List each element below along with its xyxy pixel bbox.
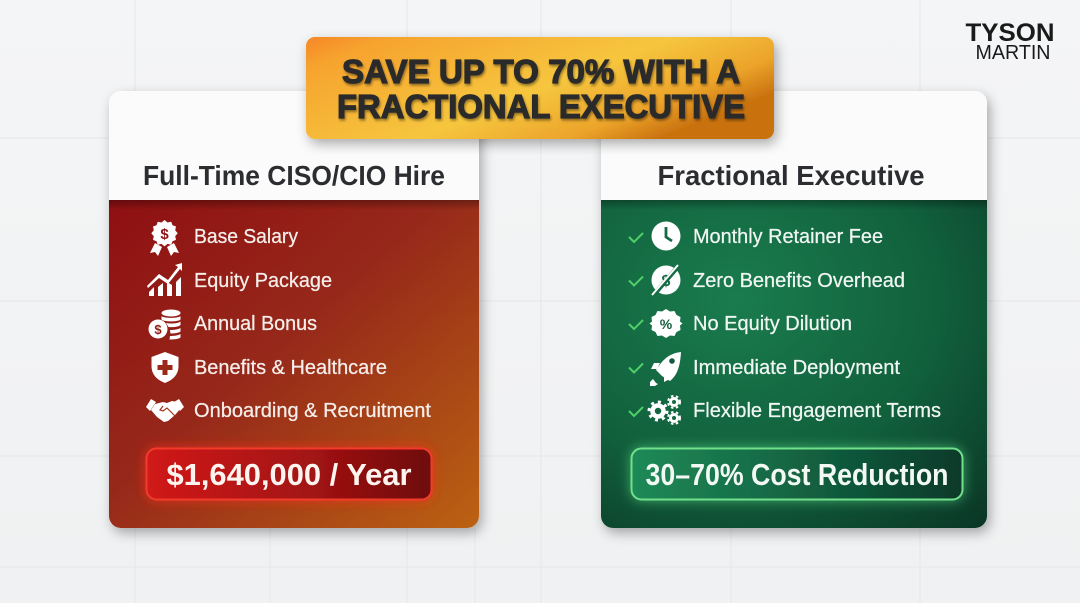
- card: fractional base: [601, 91, 987, 528]
- icon: crossed-out dollar: $: [662, 273, 671, 290]
- label: Annual Bonus: [194, 313, 317, 335]
- icon: shield: [152, 352, 178, 383]
- icon: growth chart: [147, 263, 182, 296]
- label: Flexible Engagement Terms: [693, 400, 941, 422]
- label: Zero Benefits Overhead: [693, 270, 905, 292]
- icon: coins: [148, 310, 180, 340]
- icon: rocket: [650, 352, 681, 386]
- cost callout: full-time: [146, 448, 432, 500]
- title text: FRACTIONAL EXECUTIVE: [337, 88, 745, 125]
- heading: full-time: Full-Time CISO/CIO Hire: [143, 160, 445, 191]
- savings callout: fractional: 30–70% Cost Reduction: [646, 457, 948, 492]
- checkmarks: [629, 233, 643, 416]
- label: Equity Package: [194, 270, 332, 292]
- panel: full-time hire: [109, 91, 479, 528]
- logo: Tyson Martin: TYSON: [966, 19, 1054, 47]
- title banner: [306, 37, 774, 139]
- icon: percent badge: %: [660, 316, 673, 332]
- icon: handshake: [146, 399, 184, 422]
- title text: [337, 53, 745, 125]
- icon: salary ribbon: $: [160, 226, 169, 243]
- label: No Equity Dilution: [693, 313, 852, 335]
- icon: crossed-out dollar: [652, 265, 680, 295]
- icon: coins: $: [154, 322, 162, 337]
- label: Base Salary: [194, 226, 298, 248]
- icon: salary ribbon: [150, 220, 179, 256]
- heading: fractional: Fractional Executive: [658, 160, 924, 191]
- label: Onboarding & Recruitment: [194, 400, 431, 422]
- card header: fractional: [601, 200, 987, 528]
- panel: fractional executive: [601, 91, 987, 528]
- icon: percent badge: [650, 309, 682, 338]
- card header: full-time: [109, 200, 479, 528]
- logo: Tyson Martin: MARTIN: [976, 42, 1050, 64]
- savings callout: fractional: [632, 448, 962, 500]
- icon: gears: [649, 396, 680, 424]
- label: Monthly Retainer Fee: [693, 226, 883, 248]
- title text: SAVE UP TO 70% WITH A: [342, 53, 740, 90]
- icon: clock: [652, 222, 680, 250]
- logo: Tyson Martin: [966, 19, 1054, 64]
- cost callout: full-time: $1,640,000 / Year: [166, 457, 412, 492]
- label: Benefits & Healthcare: [194, 357, 387, 379]
- label: Immediate Deployment: [693, 357, 900, 379]
- card: full-time base: [109, 91, 479, 528]
